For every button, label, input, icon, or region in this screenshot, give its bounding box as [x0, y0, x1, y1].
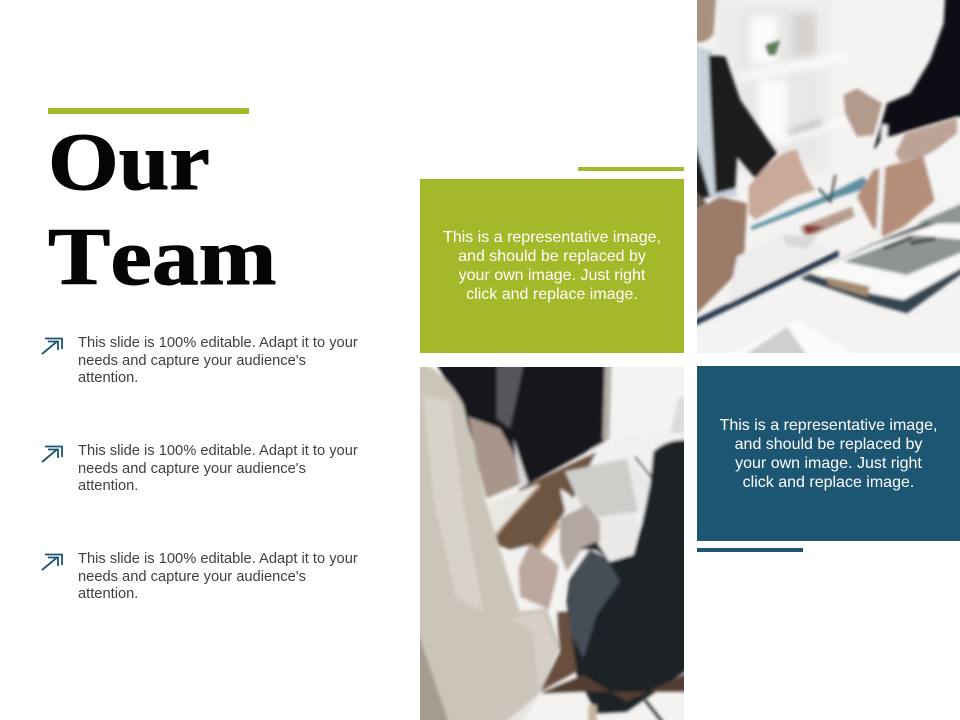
icon: double arrow [42, 446, 63, 463]
bullet text: attention. [78, 586, 138, 602]
bullet text: needs and capture your audience's [78, 460, 306, 476]
panel: green caption: This is a representative image, [443, 229, 661, 246]
bullet text: needs and capture your audience's [78, 568, 306, 584]
bullet text: needs and capture your audience's [78, 352, 306, 368]
panel: green caption [420, 179, 684, 353]
bullet 2 [42, 443, 358, 494]
bullet text [78, 335, 358, 386]
title accent bar [48, 108, 249, 114]
title: Our: Our [48, 116, 210, 207]
panel: blue caption: This is a representative image, [720, 416, 937, 434]
bullet text [78, 551, 358, 602]
bullet text [78, 443, 358, 494]
bullet text: This slide is 100% editable. Adapt it to your [78, 551, 358, 567]
blue accent bar [697, 548, 803, 552]
panel: blue caption: and should be replaced by [735, 436, 922, 452]
green accent bar [578, 167, 684, 171]
title: Team: Team [48, 211, 276, 302]
photo: team reviewing documents at a desk [697, 0, 960, 353]
bullet text: This slide is 100% editable. Adapt it to your [78, 335, 358, 351]
panel: blue caption [697, 366, 960, 541]
panel: blue caption: click and replace image. [743, 474, 914, 490]
photo: colleagues in discussion over a table [420, 367, 684, 720]
panel: blue caption: your own image. Just right [735, 454, 922, 472]
icon: double arrow [42, 338, 63, 355]
bullet text: attention. [78, 370, 138, 386]
panel: green caption: your own image. Just right [459, 267, 645, 284]
bullet 1 [42, 335, 358, 386]
bullet 3 [42, 551, 358, 602]
icon: double arrow [42, 554, 63, 571]
panel: green caption: click and replace image. [466, 286, 638, 303]
bullet text: This slide is 100% editable. Adapt it to your [78, 443, 358, 459]
bullet text: attention. [78, 478, 138, 494]
panel: green caption: and should be replaced by [458, 248, 646, 265]
